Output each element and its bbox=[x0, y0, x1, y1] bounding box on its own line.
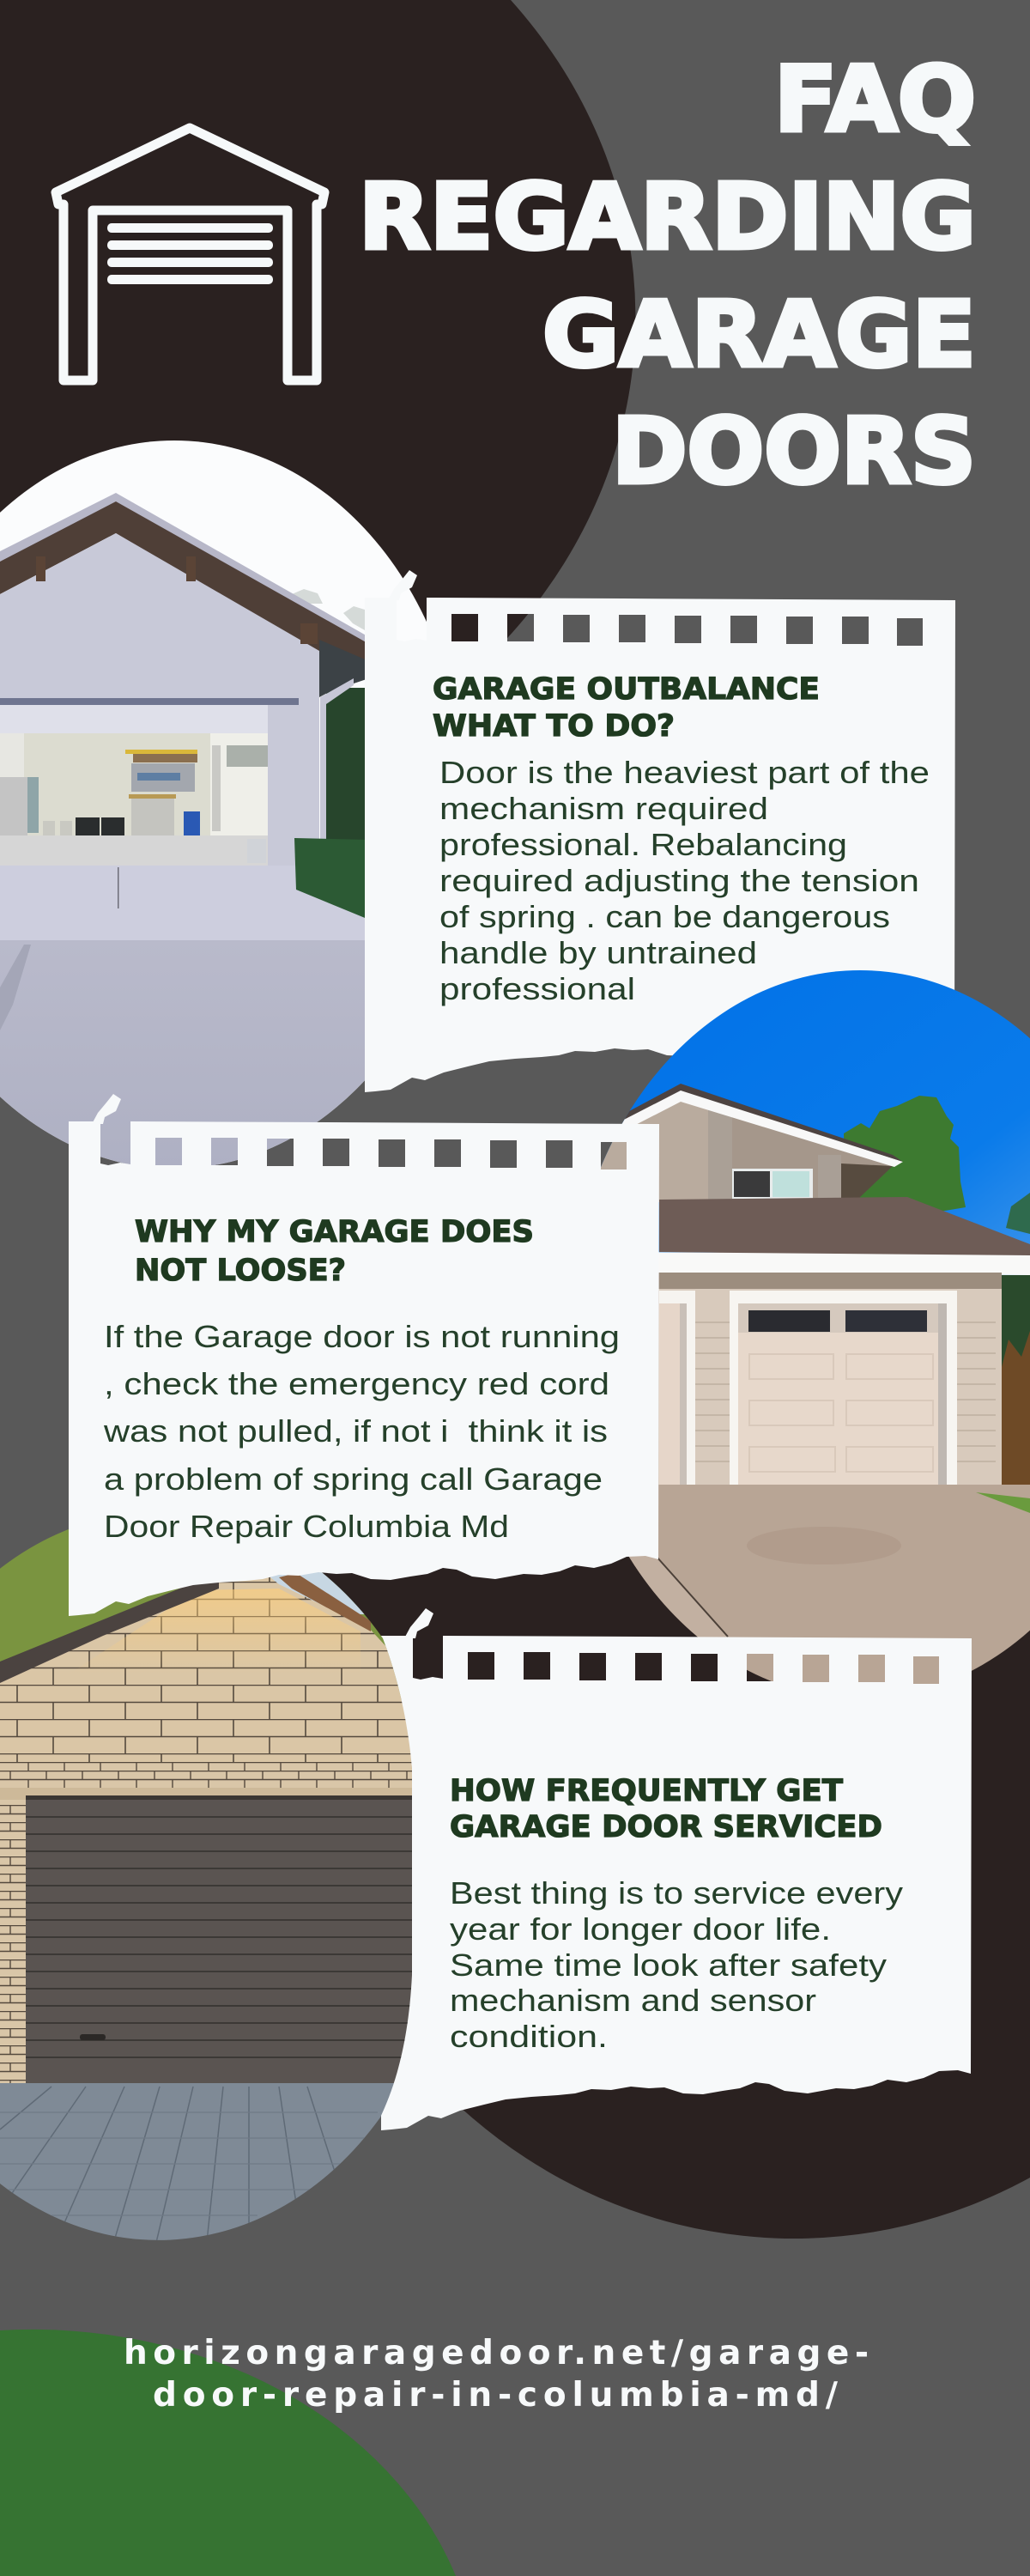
body text: card 1: professional. Rebalancing bbox=[439, 827, 847, 862]
paper: card 1 bbox=[365, 570, 955, 1092]
heading: card 3: GARAGE DOOR SERVICED bbox=[450, 1810, 882, 1844]
website address bbox=[124, 2334, 869, 2415]
title bbox=[359, 47, 976, 504]
photo: beige house under blue sky bbox=[601, 970, 1030, 1684]
body text: card 2: a problem of spring call Garage bbox=[104, 1461, 603, 1497]
heading: card 1 bbox=[433, 672, 820, 744]
heading: card 1: GARAGE OUTBALANCE bbox=[433, 672, 820, 707]
website address: door-repair-in-columbia-md/ bbox=[153, 2376, 839, 2415]
green circle: bottom left bbox=[0, 2330, 456, 2576]
body text: card 1: professional bbox=[439, 971, 635, 1006]
heading: card 1: WHAT TO DO? bbox=[433, 709, 675, 744]
note card 2 bbox=[69, 1094, 659, 1616]
body text: card 3: year for longer door life. bbox=[450, 1911, 831, 1947]
body text: card 1 bbox=[439, 755, 930, 1006]
heading: card 2: WHY MY GARAGE DOES bbox=[135, 1215, 534, 1249]
body text: card 1: handle by untrained bbox=[439, 935, 757, 970]
dark circle: top bbox=[0, 0, 635, 823]
body text: card 2: , check the emergency red cord bbox=[104, 1366, 609, 1401]
body text: card 2: was not pulled, if not i think it is bbox=[103, 1413, 608, 1449]
body text: card 1: of spring . can be dangerous bbox=[439, 899, 890, 934]
photo: brick garage with dark door bbox=[0, 1503, 421, 2255]
title: GARAGE bbox=[542, 283, 976, 387]
body text: card 3: mechanism and sensor bbox=[450, 1983, 816, 2018]
title: DOORS bbox=[612, 399, 976, 504]
heading: card 3: HOW FREQUENTLY GET bbox=[450, 1774, 843, 1808]
title: REGARDING bbox=[359, 165, 976, 270]
dark circle: bottom bbox=[279, 1139, 1030, 2239]
body text: card 3: Best thing is to service every bbox=[450, 1875, 903, 1911]
body text: card 1: mechanism required bbox=[439, 791, 768, 826]
title: FAQ bbox=[774, 47, 976, 152]
heading: card 3 bbox=[450, 1774, 882, 1844]
note card 1 bbox=[365, 570, 955, 1092]
body text: card 2: Door Repair Columbia Md bbox=[104, 1509, 509, 1544]
heading: card 2: NOT LOOSE? bbox=[135, 1254, 346, 1288]
photo: open garage with grey walls bbox=[0, 440, 427, 1165]
body text: card 2 bbox=[103, 1319, 620, 1544]
paper: card 2 bbox=[69, 1094, 659, 1616]
body text: card 2: If the Garage door is not running bbox=[104, 1319, 620, 1354]
icon: garage outline bbox=[56, 128, 324, 380]
heading: card 2 bbox=[135, 1215, 534, 1288]
body text: card 3: condition. bbox=[450, 2019, 608, 2054]
paper: card 3 bbox=[381, 1608, 972, 2130]
body text: card 3: Same time look after safety bbox=[450, 1947, 887, 1983]
body text: card 1: Door is the heaviest part of the bbox=[439, 755, 930, 790]
note card 3 bbox=[381, 1608, 972, 2130]
body text: card 3 bbox=[450, 1875, 903, 2054]
website address: horizongaragedoor.net/garage- bbox=[124, 2334, 869, 2372]
body text: card 1: required adjusting the tension bbox=[439, 863, 919, 898]
